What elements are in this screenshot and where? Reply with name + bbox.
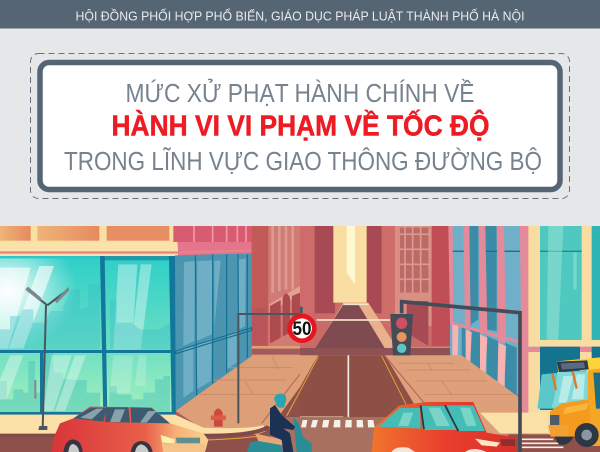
motorbike rider bbox=[247, 394, 312, 452]
bus side bbox=[587, 359, 600, 446]
scooter bbox=[247, 417, 312, 452]
glass side bbox=[175, 253, 252, 411]
bus windshield bbox=[553, 372, 593, 412]
red background building bbox=[252, 226, 300, 346]
speed limit number: 50 bbox=[292, 319, 312, 340]
speed limit 50 sign bbox=[287, 307, 317, 343]
sidewalk bbox=[0, 346, 300, 438]
sign pole bbox=[238, 314, 300, 423]
orange car bbox=[372, 402, 517, 452]
seat bbox=[255, 433, 283, 445]
title panel bbox=[30, 54, 570, 198]
right tower bbox=[522, 226, 600, 452]
header bar bbox=[0, 0, 600, 28]
illustration: left half bbox=[0, 226, 300, 452]
road bbox=[0, 374, 300, 452]
building: orange top band bbox=[0, 226, 255, 256]
far buildings bbox=[300, 226, 452, 346]
header bar: HỘI ĐỒNG PHỐI HỢP PHỔ BIẾN, GIÁO DỤC PHÁP LUẬT THÀNH PHỐ HÀ NỘI bbox=[76, 8, 524, 24]
illustration: right half bbox=[287, 226, 600, 452]
street illustration bbox=[0, 226, 600, 452]
school bus bbox=[548, 357, 600, 447]
bus hood bbox=[550, 399, 591, 437]
bus roof bbox=[557, 357, 600, 372]
rider body bbox=[270, 405, 295, 452]
fire hydrant bbox=[211, 408, 226, 427]
road surface bbox=[300, 355, 600, 452]
title line 1: MỨC XỬ PHẠT HÀNH CHÍNH VỀ bbox=[126, 77, 474, 108]
traffic light bbox=[390, 302, 520, 452]
title line 2: HÀNH VI VI PHẠM VỀ TỐC ĐỘ bbox=[112, 110, 490, 142]
blue building bbox=[448, 226, 528, 414]
street lamp bbox=[25, 287, 70, 430]
near sidewalk bbox=[383, 355, 548, 434]
distant road bbox=[300, 303, 462, 355]
red car bbox=[52, 407, 208, 452]
glass front bbox=[0, 256, 176, 415]
rider helmet bbox=[274, 394, 286, 408]
crosswalk bbox=[301, 420, 375, 427]
